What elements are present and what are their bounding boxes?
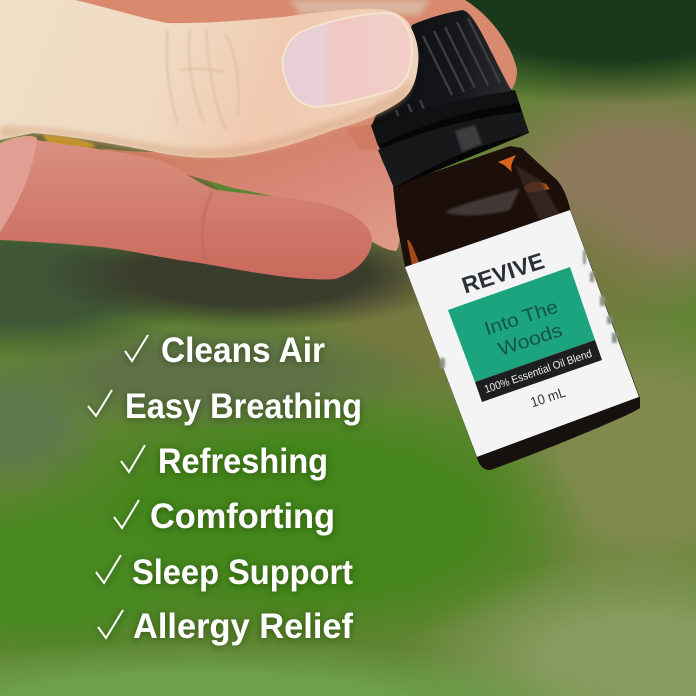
second collar ring (378, 112, 529, 188)
blend caption: 100% Essential Oil Blend (483, 348, 594, 396)
thumb shading (0, 78, 412, 158)
first collar ring (371, 91, 519, 146)
red shadow under thumb (345, 124, 378, 150)
product name line 2: Woods (496, 320, 565, 361)
green panel (448, 267, 595, 382)
black band (475, 340, 602, 402)
item: sleep support: Sleep Support (132, 553, 353, 592)
bottle cap with ribs (371, 10, 529, 188)
gap shadow with ring (20, 132, 220, 190)
thumb shape (0, 0, 419, 158)
left finger knuckle (0, 136, 37, 232)
pale top part of far finger (290, 0, 430, 15)
far finger behind the thumb and cap (70, 0, 517, 160)
essential oil bottle (371, 10, 640, 470)
gold ring on hidden finger (42, 134, 96, 149)
thumb knuckle wrinkles (167, 28, 239, 130)
thumbnail (283, 13, 412, 107)
collar highlight (455, 125, 482, 152)
edge print left and right (440, 250, 617, 368)
product name: Into The (482, 297, 561, 340)
brand name: REVIVE (459, 248, 547, 298)
lower finger crease (202, 192, 212, 262)
item: refreshing: Refreshing (158, 442, 328, 481)
back of hand: fingers behind bottle (0, 0, 517, 279)
middle finger behind (100, 124, 401, 251)
item: allergy relief: Allergy Relief (133, 607, 353, 646)
item: cleans air: Cleans Air (161, 331, 325, 370)
amber glass body (393, 146, 640, 470)
benefits checklist (88, 331, 362, 646)
thumb in front of the cap (0, 0, 419, 158)
item: easy breathing: Easy Breathing (125, 387, 362, 426)
white label (405, 210, 639, 457)
collar backing (371, 90, 529, 188)
glass highlights (407, 155, 560, 265)
bottle base (477, 397, 640, 470)
volume: 10 mL (528, 384, 568, 410)
lower finger (0, 140, 372, 279)
item: comforting: Comforting (150, 497, 335, 536)
